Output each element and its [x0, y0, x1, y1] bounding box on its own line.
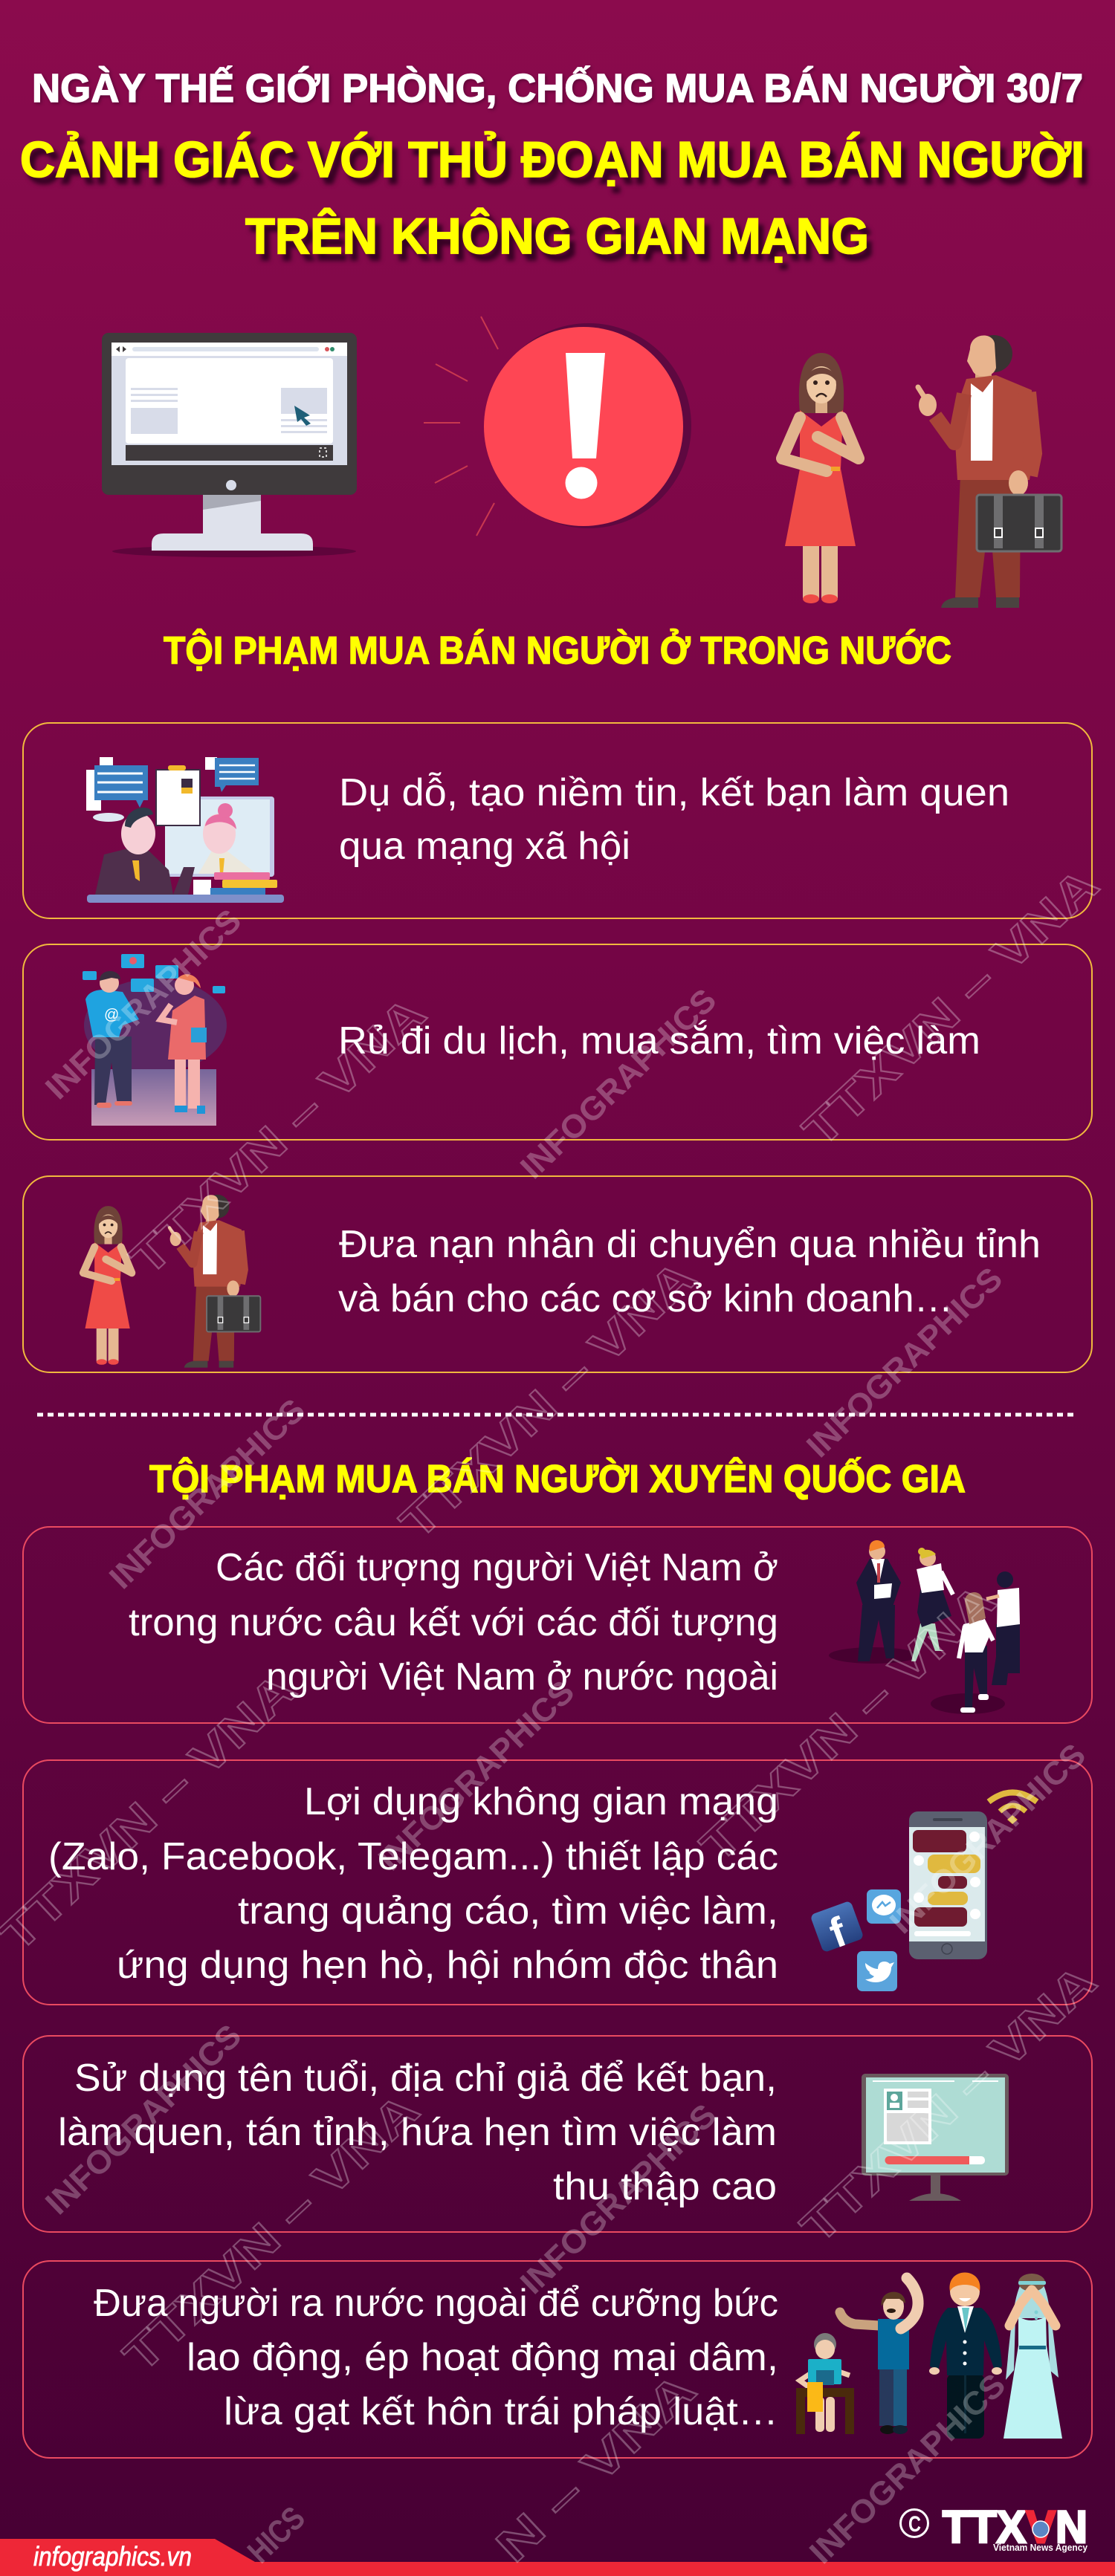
text: trong nước câu kết với các đối tượng [129, 1601, 778, 1644]
footer: website: infographics.vn [33, 2541, 192, 2572]
icon: facebook: f [823, 1908, 853, 1956]
watermark pattern: INFOGRAPHICS [39, 2017, 248, 2222]
text: người Việt Nam ở nước ngoài [266, 1655, 778, 1699]
illustration: couple with chat bubbles: @ [104, 1007, 119, 1023]
watermark pattern: INFOGRAPHICS [514, 982, 723, 1186]
watermark pattern: TTXVN – VNA [390, 1251, 705, 1549]
illustration: computer monitor [102, 333, 357, 557]
icon: warning exclamation [424, 317, 691, 536]
watermark pattern: INFOGRAPHICS [103, 1392, 312, 1596]
watermark pattern: INFOGRAPHICS [800, 1260, 1009, 1464]
title: main line 1: CẢNH GIÁC VỚI THỦ ĐOẠN MUA BÁN NGƯỜI [20, 131, 1085, 188]
watermark pattern: N – VNA [486, 2364, 705, 2572]
text [48, 1780, 778, 1987]
text: Đưa người ra nước ngoài để cưỡng bức [94, 2282, 778, 2325]
panel: social network lures [23, 1760, 1092, 2005]
illustration: labourer [840, 2278, 918, 2434]
text: làm quen, tán tỉnh, hứa hẹn tìm việc làm [58, 2111, 777, 2154]
illustration: seamstress [796, 2333, 854, 2434]
logo: copyright and TTXVN: TTXVN [943, 2502, 1087, 2552]
icon: messenger [867, 1889, 901, 1924]
watermark pattern: HICS [241, 2499, 312, 2570]
text [339, 771, 1009, 868]
text: lừa gạt kết hôn trái pháp luật… [224, 2390, 778, 2433]
text: Sử dụng tên tuổi, địa chỉ giả để kết bạn, [74, 2057, 777, 2100]
text: Rủ đi du lịch, mua sắm, tìm việc làm [338, 1019, 980, 1062]
icon: facebook [810, 1901, 867, 1962]
text: trang quảng cáo, tìm việc làm, [238, 1889, 778, 1933]
illustration: crying bride [1003, 2274, 1062, 2439]
watermark pattern: TTXVN – VNA [114, 2084, 429, 2382]
divider [37, 1413, 1078, 1416]
watermark pattern: INFOGRAPHICS [39, 902, 248, 1106]
text [338, 1223, 1041, 1320]
panel: forced labour and illegal marriage [23, 2261, 1092, 2458]
panel: fake identities [23, 2036, 1092, 2232]
icon: phone chat [909, 1811, 987, 1959]
illustration: victim woman [782, 353, 859, 603]
illustration: group of people [829, 1540, 1020, 1714]
illustration: woman and man [83, 1195, 260, 1368]
text: Lợi dụng không gian mạng [304, 1780, 778, 1823]
text: (Zalo, Facebook, Telegam...) thiết lập các [48, 1835, 778, 1878]
logo: copyright and TTXVN: C [908, 2512, 921, 2537]
watermark pattern: INFOGRAPHICS [803, 2366, 1012, 2571]
heading: transnational section: TỘI PHẠM MUA BÁN NGƯỜI XUYÊN QUỐC GIA [149, 1457, 966, 1501]
text: Đưa nạn nhân di chuyển qua nhiều tỉnh [339, 1223, 1041, 1266]
title: main line 2: TRÊN KHÔNG GIAN MẠNG [245, 207, 869, 265]
title: day line: NGÀY THẾ GIỚI PHÒNG, CHỐNG MUA BÁN NGƯỜI 30/7 [32, 66, 1083, 111]
illustration: groom [929, 2272, 1002, 2439]
panel: moving and selling victims [23, 1176, 1092, 1372]
panel: collusion across borders [23, 1527, 1092, 1723]
watermark pattern: INFOGRAPHICS [372, 1673, 581, 1878]
text [129, 1546, 778, 1699]
watermark pattern: TTXVN – VNA [791, 1956, 1106, 2254]
text [94, 2282, 778, 2433]
text: thu thập cao [553, 2165, 777, 2208]
illustration: trafficker man with briefcase [918, 335, 1061, 608]
text: ứng dụng hẹn hò, hội nhóm độc thân [117, 1944, 778, 1987]
text: lao động, ép hoạt động mại dâm, [187, 2336, 778, 2379]
watermark pattern: INFOGRAPHICS [883, 1736, 1093, 1941]
illustration: monitor with profile [862, 2074, 1009, 2201]
watermark pattern: TTXVN – VNA [120, 987, 436, 1285]
text: Dụ dỗ, tạo niềm tin, kết bạn làm quen [339, 771, 1009, 814]
text [58, 2057, 777, 2208]
text: Các đối tượng người Việt Nam ở [216, 1546, 778, 1589]
logo: copyright and TTXVN: Vietnam News Agency [993, 2542, 1088, 2553]
heading: domestic section: TỘI PHẠM MUA BÁN NGƯỜI Ở TRONG NƯỚC [164, 629, 951, 672]
icon: twitter [857, 1951, 897, 1991]
panel: befriending online [23, 723, 1092, 918]
text: qua mạng xã hội [339, 825, 630, 868]
watermark pattern: TTXVN – VNA [793, 859, 1108, 1157]
watermark pattern [0, 859, 1108, 2572]
watermark pattern: TTXVN – VNA [691, 1574, 1006, 1872]
panel: travel and job invitations [23, 944, 1092, 1140]
illustration: couple with chat bubbles [83, 954, 227, 1126]
text: và bán cho các cơ sở kinh doanh… [338, 1277, 953, 1320]
footer bar [0, 2539, 1115, 2576]
icon: wifi [989, 1792, 1037, 1824]
watermark pattern: INFOGRAPHICS [514, 2097, 723, 2301]
illustration: video chat [86, 757, 284, 903]
